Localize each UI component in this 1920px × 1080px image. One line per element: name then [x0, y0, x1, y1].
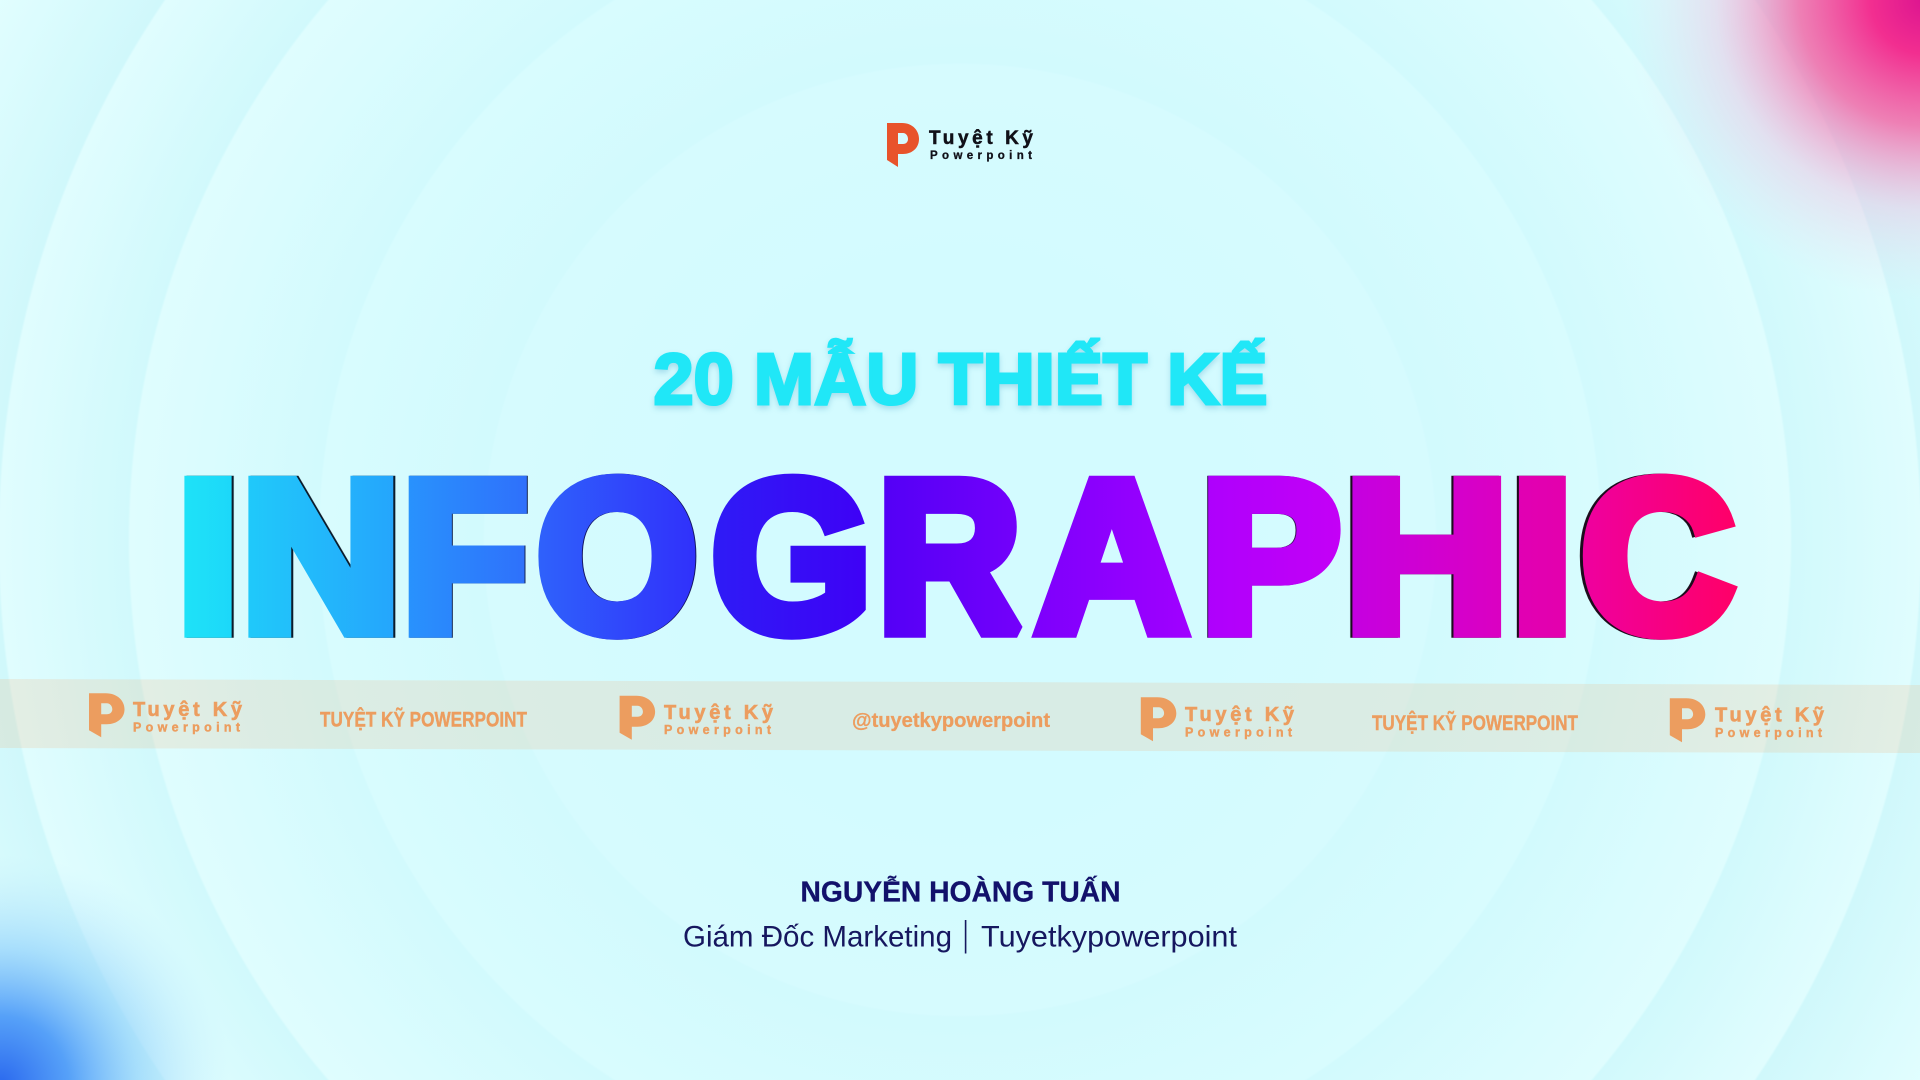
- watermark logo 1: Powerpoint: [133, 720, 241, 734]
- main title: INFOGRAPHIC: O: [537, 436, 697, 677]
- subtitle: 20 MẪU THIẾT KẾ: [654, 339, 1268, 420]
- watermark text 2: TUYỆT KỸ POWERPOINT: [1372, 711, 1578, 735]
- main title: INFOGRAPHIC: F: [402, 436, 528, 677]
- watermark text 1: TUYỆT KỸ POWERPOINT: [320, 708, 527, 732]
- watermark logo 2: Tuyệt Kỹ: [664, 702, 774, 724]
- author name: NGUYỄN HOÀNG TUẤN: [800, 875, 1120, 909]
- watermark logo 1: Tuyệt Kỹ: [133, 699, 243, 721]
- watermark handle: @tuyetkypowerpoint: [852, 710, 1050, 732]
- logo wordmark: Powerpoint: [930, 150, 1032, 162]
- main title: INFOGRAPHIC: A: [1036, 437, 1188, 677]
- watermark logo 3: [1141, 697, 1295, 741]
- main title: INFOGRAPHIC: P: [1201, 437, 1341, 677]
- main title: INFOGRAPHIC: [177, 436, 1735, 677]
- watermark logo 1: [89, 693, 243, 737]
- main title: INFOGRAPHIC: I: [1511, 436, 1574, 677]
- main title: INFOGRAPHIC: R: [877, 436, 1021, 676]
- watermark logo 2: [620, 696, 774, 740]
- author role: Giám Đốc Marketing: [683, 921, 952, 954]
- watermark logo 3: Powerpoint: [1185, 726, 1293, 740]
- watermark band: [0, 679, 1920, 753]
- main title: INFOGRAPHIC: C: [1581, 437, 1735, 677]
- watermark logo 2: Powerpoint: [664, 723, 772, 737]
- watermark logo 3: Tuyệt Kỹ: [1185, 704, 1295, 726]
- logo wordmark: [929, 128, 1033, 162]
- watermark logo 4: Powerpoint: [1715, 726, 1823, 740]
- logo wordmark: Tuyệt Kỹ: [929, 128, 1033, 149]
- author role: Tuyetkypowerpoint: [981, 921, 1237, 954]
- pink corner glow: [1600, 0, 1920, 305]
- watermark logo 4: [1670, 698, 1825, 742]
- main title: INFOGRAPHIC: N: [241, 437, 401, 677]
- top logo: [887, 123, 1033, 167]
- blue corner glow: [0, 830, 250, 1080]
- icon: P logo: [887, 123, 919, 167]
- author role: [683, 920, 1237, 954]
- main title: INFOGRAPHIC: H: [1345, 437, 1509, 676]
- main title: INFOGRAPHIC: G: [711, 436, 872, 677]
- watermark logo 4: Tuyệt Kỹ: [1715, 705, 1825, 727]
- main title: INFOGRAPHIC: I: [177, 436, 239, 677]
